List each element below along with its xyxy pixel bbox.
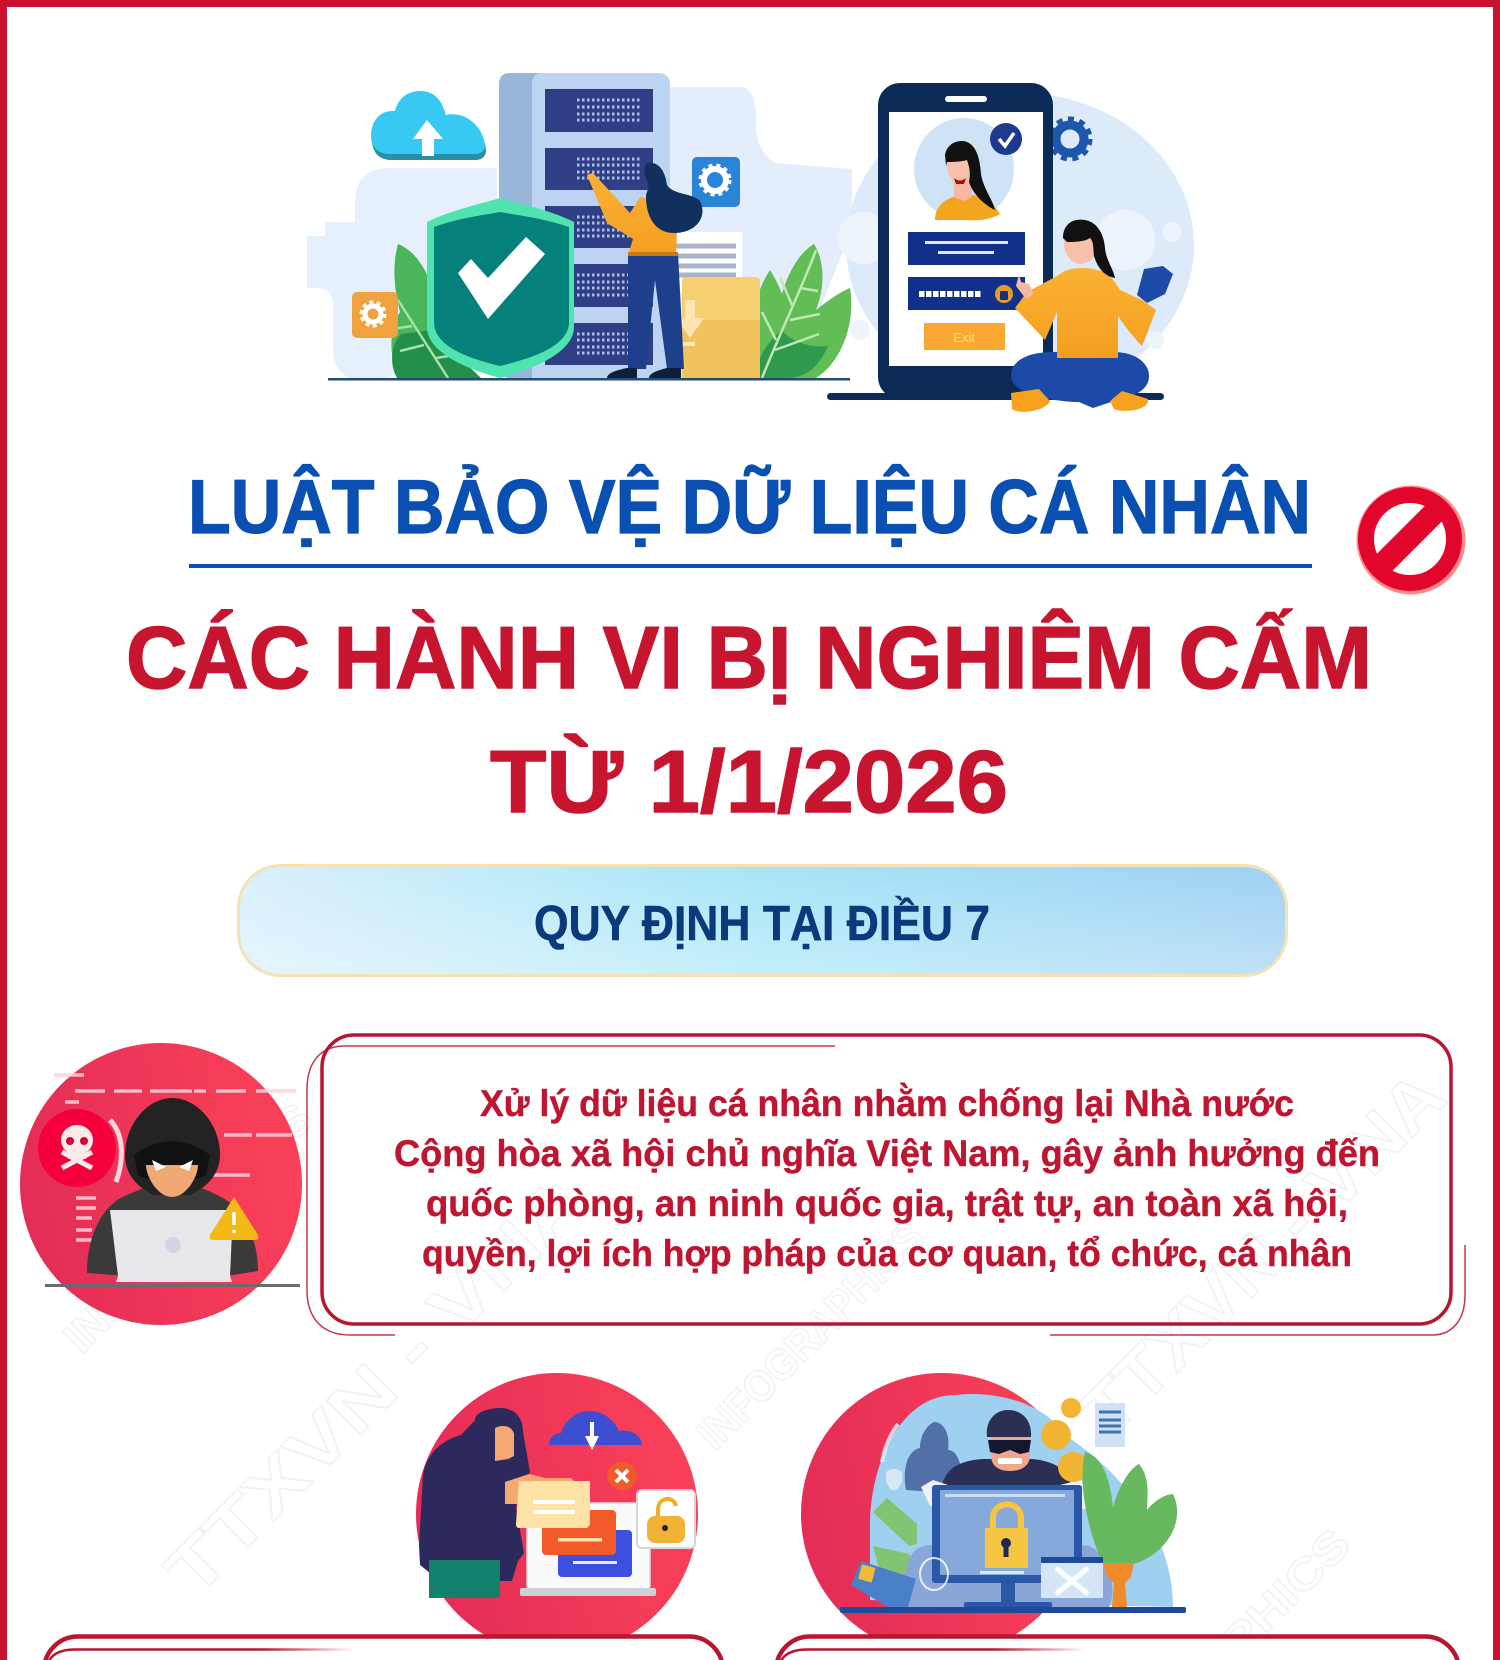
seated woman — [1011, 220, 1173, 412]
hero illustration: data security — [307, 73, 1194, 412]
file cards — [558, 1530, 632, 1577]
icon: hooded person stealing files — [416, 1373, 698, 1655]
ground line — [328, 378, 850, 380]
text box: quyền, lợi ích hợp pháp của cơ quan, tổ chức, cá nhân — [422, 1233, 1352, 1274]
watermarks: TTXVN - VNA — [1065, 1056, 1460, 1451]
watermarks: INFOGRAPHICS — [54, 1094, 322, 1362]
document sheet — [670, 232, 742, 292]
coins — [1041, 1398, 1088, 1482]
icon: download cloud — [549, 1411, 642, 1445]
main title: CÁC HÀNH VI BỊ NGHIÊM CẤM — [126, 608, 1372, 707]
laptop — [527, 1503, 650, 1589]
pill: article reference: QUY ĐỊNH TẠI ĐIỀU 7 — [534, 897, 990, 951]
icon: upload cloud — [371, 91, 486, 160]
base line — [827, 393, 1164, 400]
username field — [908, 232, 1025, 265]
icon: skull — [61, 1125, 93, 1168]
panel: prohibited act 1 — [20, 1035, 1465, 1335]
padlock — [985, 1504, 1028, 1568]
icon: blue gear tile — [692, 157, 740, 207]
exit button — [924, 323, 1005, 350]
pale background blobs — [307, 168, 497, 378]
heading underline — [189, 564, 1312, 568]
icon: orange gear tile — [352, 292, 398, 338]
credit card — [851, 1561, 916, 1607]
green leaves — [1082, 1452, 1177, 1564]
money notes — [873, 1498, 917, 1576]
pill: article reference — [238, 866, 1286, 976]
watermarks: TTXVN - VNA — [150, 1159, 602, 1611]
icon: prohibition sign — [1365, 494, 1457, 586]
gear behind phone — [1050, 119, 1090, 159]
glow streaks — [882, 1424, 898, 1462]
password field — [908, 277, 1025, 310]
watermarks — [54, 1056, 1460, 1660]
right plant — [750, 244, 851, 378]
left plant — [391, 244, 481, 378]
blue bushes — [892, 1545, 1112, 1607]
woman at server — [587, 163, 702, 378]
pale skull — [886, 1469, 902, 1490]
text box: Cộng hòa xã hội chủ nghĩa Việt Nam, gây ảnh hưởng đến — [394, 1133, 1380, 1174]
icon: thief breaking into computer — [801, 1373, 1186, 1655]
watermarks: INFOGRAPHICS — [687, 1212, 934, 1459]
panel: prohibited act 2 — [44, 1636, 723, 1660]
blue backdrop — [870, 1394, 1173, 1607]
icon: gears behind woman — [838, 210, 1182, 349]
monitor — [1001, 1583, 1015, 1603]
text box — [307, 1035, 1465, 1335]
thief — [942, 1459, 1071, 1485]
ground bar — [840, 1607, 1186, 1613]
text box: quốc phòng, an ninh quốc gia, trật tự, an toàn xã hội, — [426, 1183, 1348, 1224]
smartphone — [878, 83, 1053, 399]
main title — [126, 608, 1372, 831]
pot — [1103, 1563, 1134, 1607]
shield with check — [427, 198, 574, 378]
exit button: Exit — [953, 330, 975, 345]
document — [1095, 1403, 1125, 1447]
hooded figure — [419, 1408, 530, 1581]
profile picture — [914, 118, 1014, 220]
check badge — [990, 123, 1022, 155]
text box: Xử lý dữ liệu cá nhân nhằm chống lại Nhà nước — [480, 1082, 1294, 1124]
navy plant — [905, 1422, 960, 1492]
icon: open padlock tile — [637, 1490, 695, 1548]
icon: X badge — [607, 1462, 637, 1490]
blue circle behind phone — [846, 93, 1194, 397]
broken window tile — [1041, 1557, 1103, 1598]
server tower — [499, 73, 670, 378]
icon: hacker with laptop — [20, 1043, 302, 1325]
ring — [920, 1558, 948, 1590]
panel: prohibited act 3 — [776, 1636, 1459, 1660]
main title: TỪ 1/1/2026 — [490, 732, 1008, 831]
heading: law name: LUẬT BẢO VỆ DỮ LIỆU CÁ NHÂN — [188, 464, 1311, 550]
gloves — [921, 1480, 1097, 1510]
folder with download arrow — [673, 277, 760, 378]
